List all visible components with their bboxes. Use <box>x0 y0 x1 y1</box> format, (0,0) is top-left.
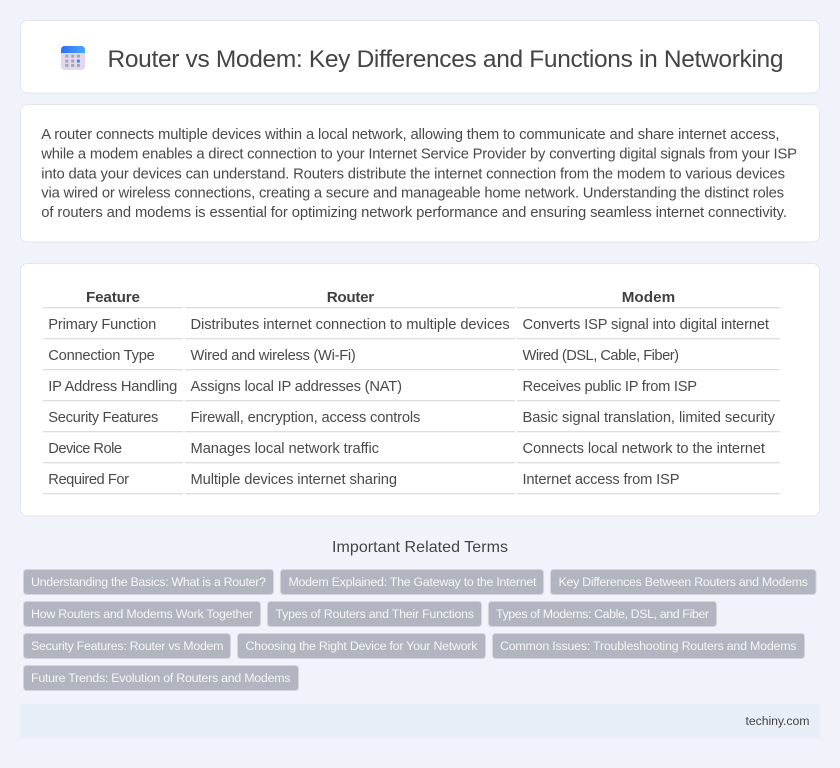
tag <box>550 570 816 594</box>
table row: ip address handling: Assigns local IP addresses (NAT) <box>190 379 402 395</box>
panel: introduction <box>20 104 820 242</box>
table row: connection type: Wired (DSL, Cable, Fiber) <box>522 348 679 364</box>
panel: comparison table <box>20 264 820 516</box>
table row: security features: Security Features <box>48 410 158 426</box>
icon: calendar <box>61 46 85 70</box>
text block: introduction paragraph: while a modem enables a direct connection to your Internet Service Provider by converting digital signals from your ISP <box>40 147 797 163</box>
tag <box>238 634 486 658</box>
footer source text: techiny.com <box>746 714 810 728</box>
tag: Modem Explained: The Gateway to the Internet <box>288 575 537 589</box>
table row: security features: Firewall, encryption, access controls <box>190 410 420 426</box>
text block: introduction paragraph: A router connects multiple devices within a local network, allowing them to communicate and share internet access, <box>41 127 780 143</box>
text block: introduction paragraph: into data your devices can understand. Routers distribute the internet connection from the modem to various devices <box>41 166 785 182</box>
table header: Modem <box>622 289 675 306</box>
table header: Router <box>327 289 374 306</box>
table row: device role: Device Role <box>48 441 122 457</box>
tag: Future Trends: Evolution of Routers and Modems <box>31 671 290 685</box>
related terms tags <box>24 570 816 690</box>
table header: Feature <box>86 289 140 306</box>
title: Router vs Modem: Key Differences and Functions in Networking <box>108 46 784 73</box>
tag: Security Features: Router vs Modem <box>31 639 224 653</box>
table row: device role <box>43 441 780 463</box>
text block: introduction paragraph: of routers and modems is essential for optimizing network performance and ensuring seamless internet connectivity. <box>41 205 787 221</box>
tag: Choosing the Right Device for Your Network <box>246 639 478 653</box>
table row: device role: Manages local network traffic <box>190 441 379 457</box>
tag: How Routers and Modems Work Together <box>31 607 253 621</box>
text block: introduction paragraph <box>40 127 797 221</box>
table row: connection type: Connection Type <box>48 348 155 364</box>
tag <box>24 666 298 690</box>
tag: Types of Routers and Their Functions <box>276 607 474 621</box>
tag: Common Issues: Troubleshooting Routers and Modems <box>500 639 796 653</box>
table row: required for: Multiple devices internet sharing <box>190 472 397 488</box>
footer bar <box>20 704 820 738</box>
table row: ip address handling: Receives public IP from ISP <box>522 379 697 395</box>
tag <box>24 570 274 594</box>
table row: connection type: Wired and wireless (Wi-Fi) <box>190 348 356 364</box>
tag <box>488 602 716 626</box>
table row: required for <box>43 472 780 494</box>
text block: introduction paragraph: via wired or wireless connections, creating a secure and manageable home network. Understanding the distinct roles <box>41 186 784 202</box>
tag: Key Differences Between Routers and Modems <box>558 575 808 589</box>
table row: required for: Internet access from ISP <box>522 472 680 488</box>
table row: device role: Connects local network to the internet <box>522 441 765 457</box>
table row: primary function: Converts ISP signal into digital internet <box>522 317 769 333</box>
table row: ip address handling <box>43 379 780 401</box>
table row: security features: Basic signal translation, limited security <box>522 410 776 426</box>
panel: title header <box>20 20 820 93</box>
table row: connection type <box>43 348 780 370</box>
table row: primary function: Primary Function <box>48 317 156 333</box>
table header <box>43 289 780 308</box>
tag: Understanding the Basics: What is a Router? <box>31 575 266 589</box>
table row: primary function: Distributes internet connection to multiple devices <box>190 317 510 333</box>
table row: ip address handling: IP Address Handling <box>48 379 177 395</box>
tag <box>24 602 260 626</box>
table row: primary function <box>43 317 780 339</box>
tag <box>24 634 230 658</box>
tag: Types of Modems: Cable, DSL, and Fiber <box>496 607 709 621</box>
table row: security features <box>43 410 780 432</box>
tag <box>280 570 544 594</box>
table row: required for: Required For <box>48 472 129 488</box>
heading: important related terms: Important Related Terms <box>332 539 508 556</box>
tag <box>268 602 482 626</box>
tag <box>492 634 804 658</box>
